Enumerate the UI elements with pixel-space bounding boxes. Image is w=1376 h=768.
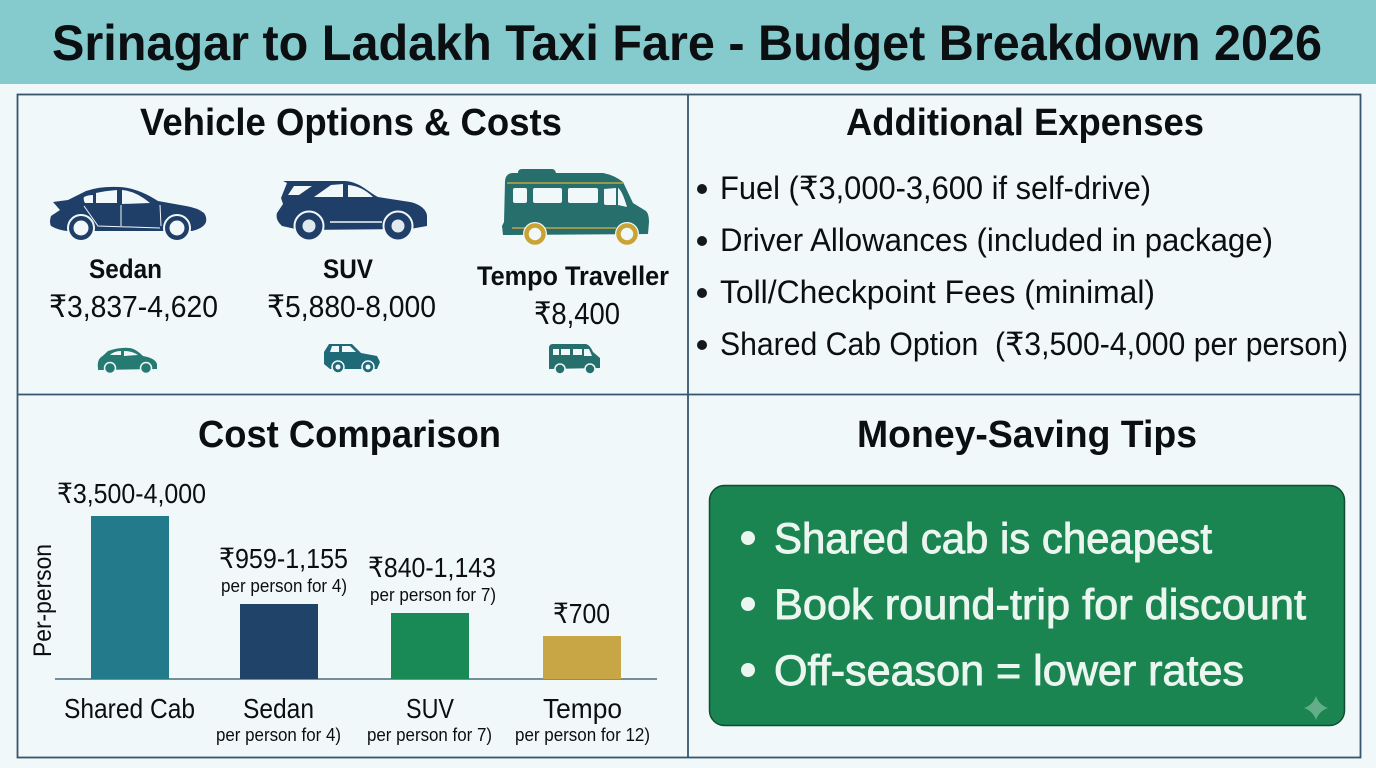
- bar: SUV: [391, 613, 469, 679]
- tip: off-season: Off-season = lower rates: [774, 647, 1244, 695]
- expense: fuel: Fuel (₹3,000-3,600 if self-drive): [720, 170, 1151, 206]
- title banner: [0, 0, 1376, 84]
- icon: small van: [549, 344, 600, 374]
- vehicle price: SUV: ₹5,880-8,000: [267, 289, 436, 324]
- axis label: Per-person: [29, 544, 57, 657]
- category note: sedan: per person for 4): [216, 725, 341, 745]
- icon: small SUV: [324, 344, 380, 373]
- vehicle label: SUV: SUV: [323, 254, 373, 284]
- bar: sedan: [240, 604, 318, 679]
- panel: additional expenses: [697, 102, 1348, 362]
- value: sedan: ₹959-1,155: [219, 543, 348, 574]
- tips box: [710, 486, 1344, 726]
- tip: round trip: Book round-trip for discount: [774, 581, 1306, 629]
- value: SUV: ₹840-1,143: [368, 552, 496, 583]
- category: SUV: SUV: [406, 693, 454, 724]
- icon: SUV: [277, 181, 427, 240]
- heading: additional expenses: Additional Expenses: [846, 102, 1204, 144]
- vehicle label: tempo traveller: Tempo Traveller: [477, 261, 669, 291]
- icon: small sedan: [98, 348, 157, 374]
- panel: vehicle options and costs: [49, 102, 669, 374]
- icon: tempo traveller: [502, 169, 649, 246]
- category: tempo: Tempo: [543, 693, 622, 724]
- bar: shared cab: [91, 516, 169, 679]
- note: sedan value: per person for 4): [221, 576, 347, 596]
- heading: cost comparison: Cost Comparison: [198, 414, 501, 456]
- value: tempo: ₹700: [553, 598, 610, 629]
- vehicle label: sedan: Sedan: [89, 254, 162, 284]
- value: shared cab: ₹3,500-4,000: [57, 478, 206, 509]
- heading: vehicle options: Vehicle Options & Costs: [140, 102, 562, 144]
- heading: money-saving tips: Money-Saving Tips: [857, 414, 1197, 456]
- icon: sedan: [50, 187, 206, 241]
- panel: cost comparison: [29, 414, 657, 745]
- tip: shared cab: Shared cab is cheapest: [774, 515, 1212, 563]
- expense: toll fees: Toll/Checkpoint Fees (minimal): [720, 274, 1155, 310]
- title: Srinagar to Ladakh Taxi Fare - Budget Breakdown 2026: [52, 15, 1322, 71]
- bar chart: [55, 478, 657, 745]
- expense: driver allowances: Driver Allowances (included in package): [720, 222, 1273, 258]
- category: sedan: Sedan: [243, 693, 314, 724]
- icon: sparkle: [1304, 696, 1328, 720]
- note: SUV value: per person for 7): [370, 585, 496, 605]
- vehicle price: tempo traveller: ₹8,400: [534, 296, 620, 331]
- vehicle price: sedan: ₹3,837-4,620: [49, 289, 218, 324]
- category: shared cab: Shared Cab: [64, 693, 195, 724]
- bar: tempo: [543, 636, 621, 679]
- category note: SUV: per person for 7): [367, 725, 492, 745]
- expense: shared cab: Shared Cab Option (₹3,500-4,000 per person): [720, 326, 1348, 362]
- category note: tempo: per person for 12): [515, 725, 650, 745]
- panel: money-saving tips: [710, 414, 1344, 726]
